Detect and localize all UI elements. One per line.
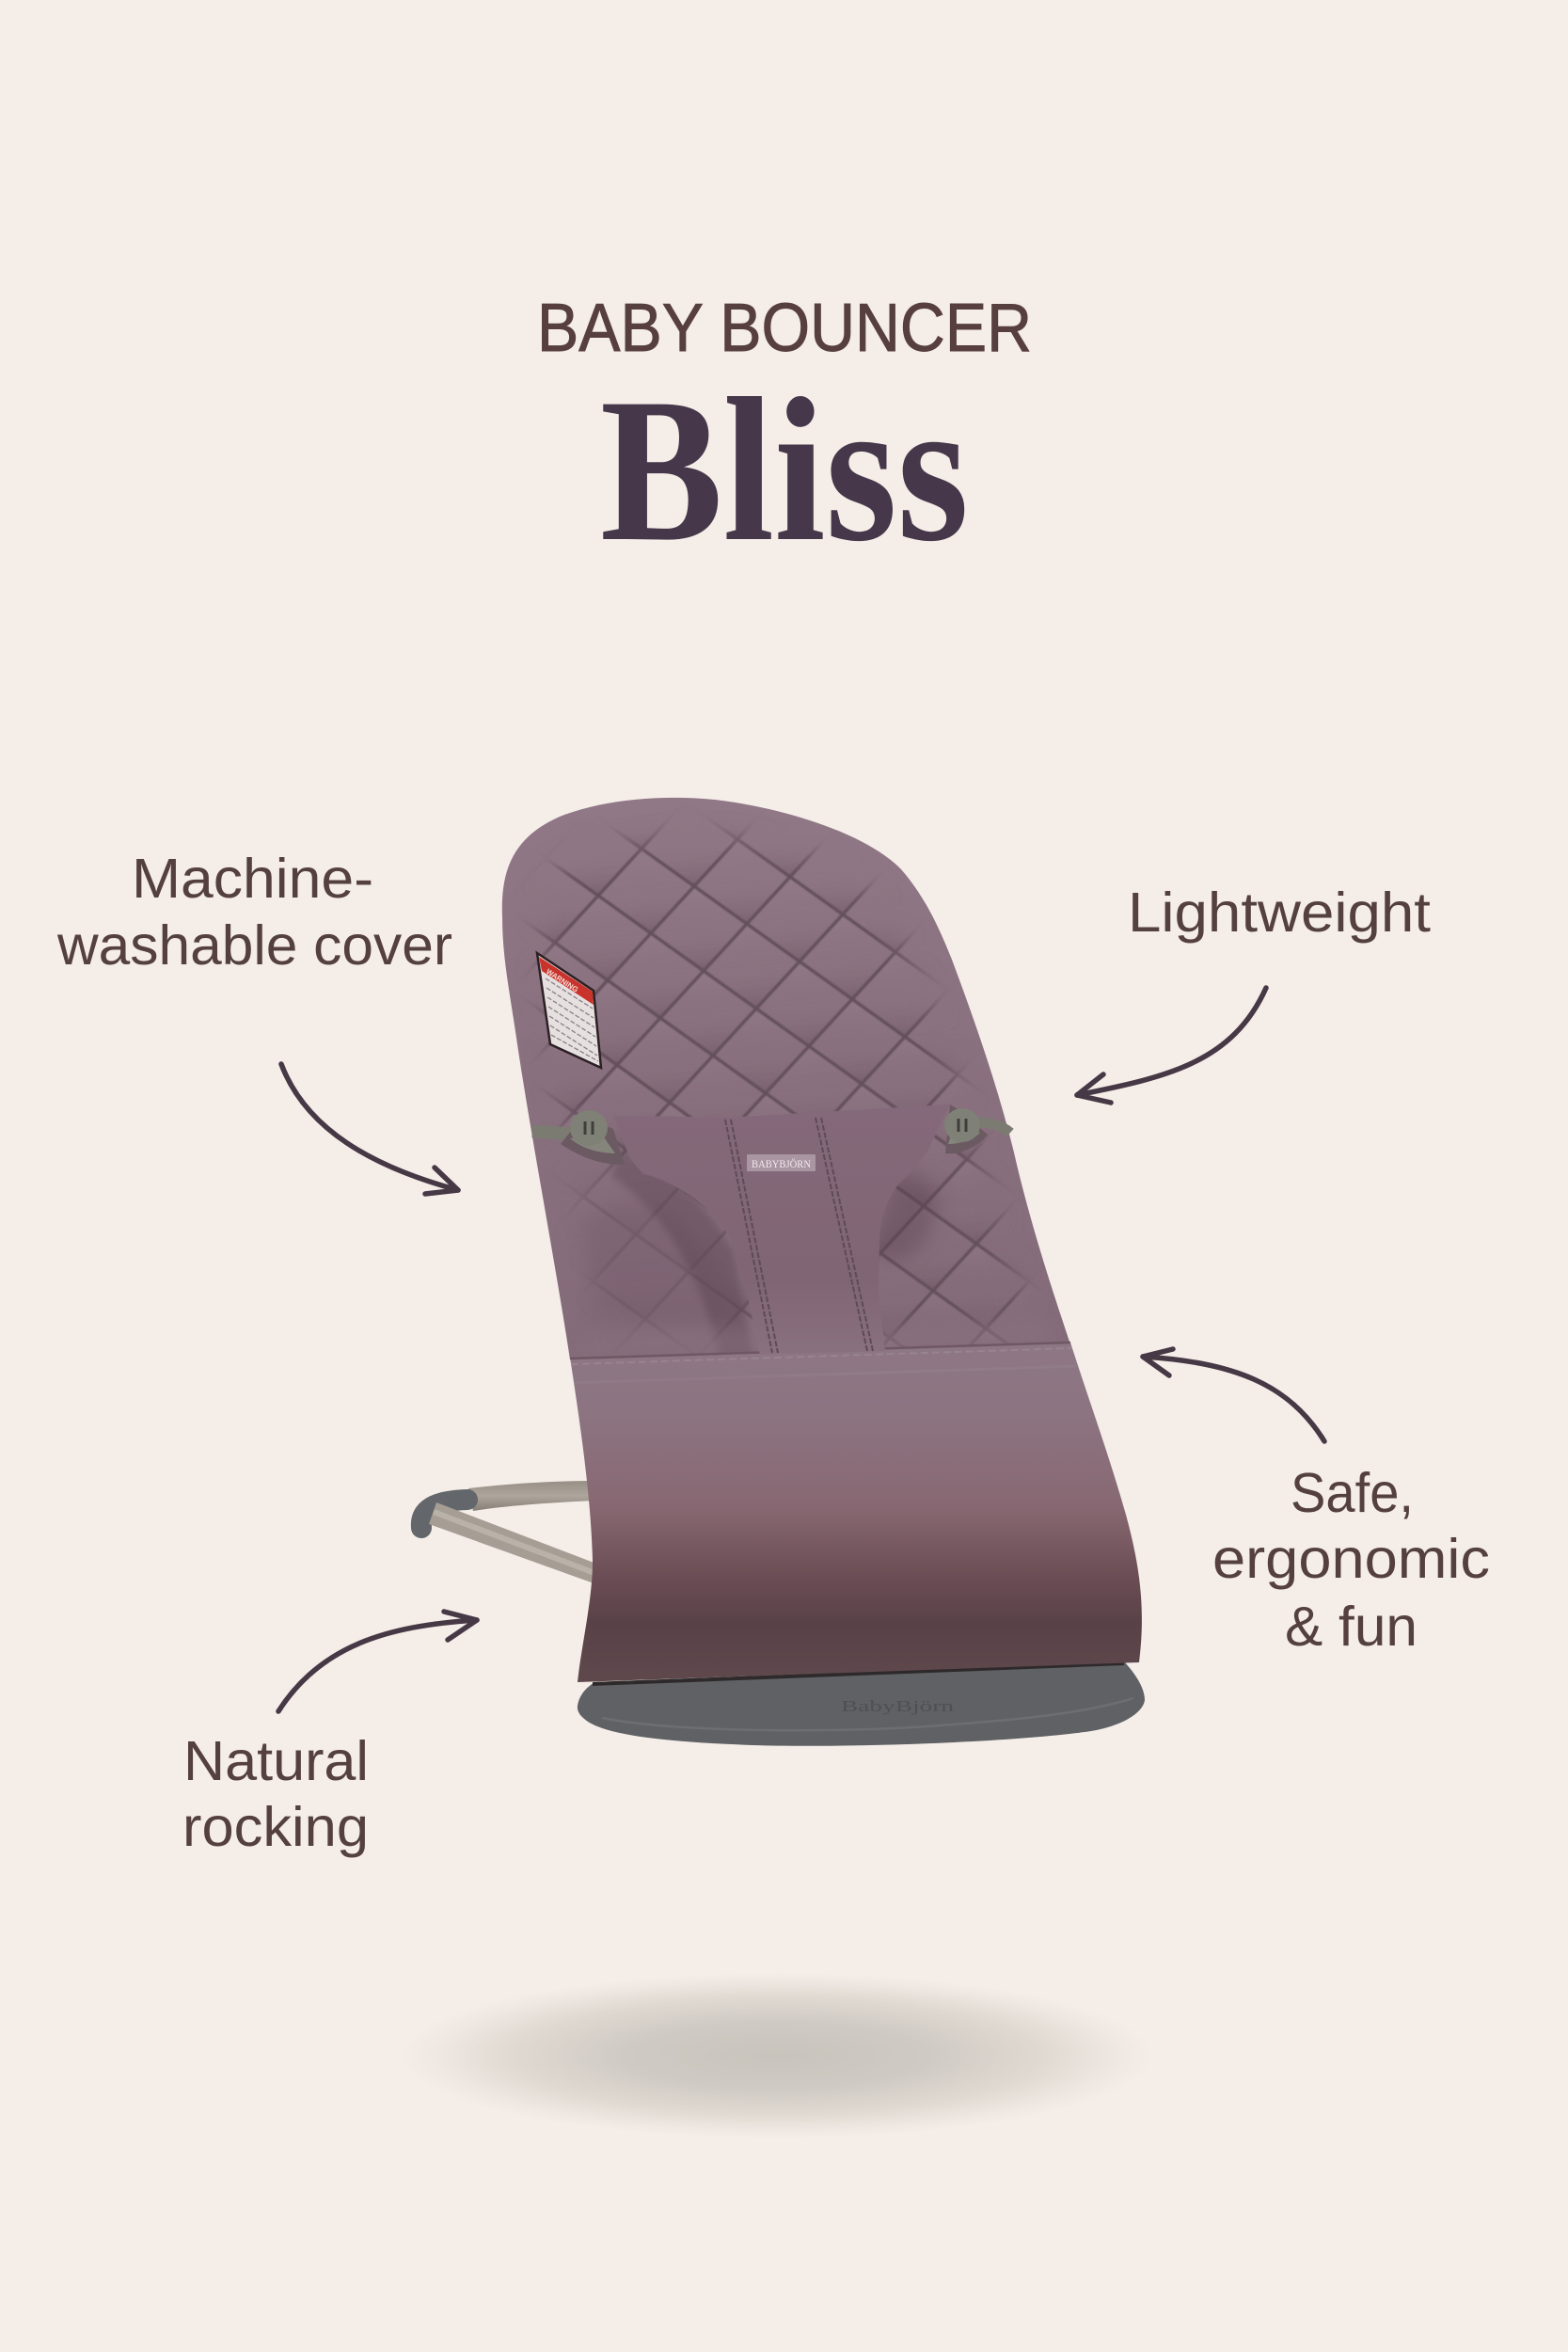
label: safe, ergonomic and fun: [1212, 1462, 1490, 1658]
label: machine-washable cover: [56, 848, 452, 977]
title: Bliss: Bliss: [600, 357, 969, 584]
infographic page: [57, 303, 1488, 2128]
floor shadow: [401, 1973, 1153, 2138]
label: safe, ergonomic and fun: ergonomic: [1212, 1528, 1490, 1590]
left buckle: [532, 1110, 625, 1165]
upper frame tube: [468, 1481, 594, 1511]
lower frame tube: [429, 1502, 596, 1584]
label: lightweight: Lightweight: [1128, 882, 1431, 944]
right buckle: [944, 1104, 1010, 1153]
base logo: BabyBjörn: [841, 1697, 955, 1715]
subtitle: baby bouncer: BABY BOUNCER: [537, 291, 1032, 366]
lower seat panel: [555, 1336, 1157, 1693]
label: natural rocking: [182, 1730, 369, 1858]
label: natural rocking: Natural: [183, 1730, 369, 1792]
frame corner cap: [421, 1500, 467, 1528]
harness tag: [747, 1154, 816, 1171]
quilted upper seat: [489, 790, 1091, 1374]
label: safe, ergonomic and fun: & fun: [1285, 1596, 1418, 1658]
bouncer frame: [421, 1481, 596, 1584]
label: machine-washable cover: washable cover: [56, 914, 452, 977]
arrow: safe, ergonomic and fun: [1143, 1349, 1324, 1441]
warning label: WARNING: [545, 967, 579, 994]
arrow: machine-washable cover: [281, 1064, 458, 1194]
bouncer fabric seat: [489, 790, 1157, 1693]
label: natural rocking: rocking: [182, 1796, 369, 1858]
arrow: natural rocking: [278, 1612, 477, 1711]
harness tag: BABYBJÖRN: [752, 1157, 811, 1170]
seat seam: [570, 1343, 1070, 1359]
bouncer base: [578, 1661, 1145, 1746]
label: safe, ergonomic and fun: Safe,: [1291, 1462, 1414, 1524]
label: machine-washable cover: Machine-: [132, 848, 373, 910]
warning label: [537, 953, 601, 1068]
arrow: lightweight: [1077, 988, 1266, 1103]
centre harness pouch: [613, 1104, 950, 1355]
